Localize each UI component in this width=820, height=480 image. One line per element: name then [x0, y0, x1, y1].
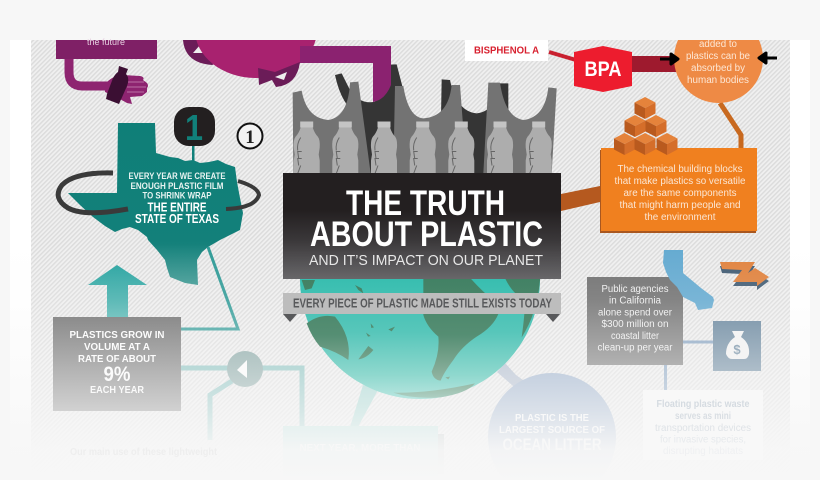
- orange chemical box: the environment: [644, 212, 716, 223]
- Texas text: [128, 171, 226, 226]
- bottles: [294, 122, 552, 180]
- California spend box: coastal litter: [611, 331, 660, 342]
- icon: hand with bottle: [105, 66, 148, 104]
- Texas text: TO SHRINK WRAP: [142, 190, 212, 200]
- orange chemical box: [600, 148, 757, 233]
- absorbed circle: added to: [699, 39, 737, 50]
- bisphenol label: BISPHENOL A: [474, 46, 539, 56]
- globe: [300, 279, 540, 399]
- floating plastic text: for invasive species,: [660, 434, 746, 446]
- growth box: 9%: [104, 363, 131, 386]
- purple text box and hand holding bottle: [56, 37, 157, 104]
- BPA connector: [549, 52, 678, 72]
- ocean litter circle: PLASTIC IS THE: [515, 412, 589, 424]
- absorbed circle: absorbed by: [691, 63, 745, 74]
- Texas text: STATE OF TEXAS: [135, 211, 219, 226]
- globe connector right: [497, 363, 530, 392]
- orange chemical box: The chemical building blocks: [618, 164, 742, 175]
- heading: THE TRUTH: [346, 184, 505, 223]
- floating plastic text: [643, 390, 763, 460]
- ocean litter circle: OCEAN LITTER: [502, 435, 602, 454]
- small numbered circle icon: [238, 124, 262, 148]
- orange connector: [720, 103, 741, 148]
- growth box: VOLUME AT A: [84, 342, 150, 353]
- title block: [283, 173, 561, 279]
- California spend box: Public agencies: [602, 284, 668, 295]
- Texas text: EVERY YEAR WE CREATE: [128, 171, 226, 181]
- absorbed circle: [674, 40, 763, 103]
- purple band over bags: [300, 46, 391, 102]
- rewind circle icon: [227, 351, 263, 387]
- growth box: RATE OF ABOUT: [78, 354, 156, 365]
- growth box: PLASTICS GROW IN: [70, 330, 164, 341]
- California spend box: alone spend over: [598, 308, 673, 318]
- icon: money bag: $: [733, 342, 741, 357]
- orange chemical box: that might harm people and: [620, 200, 740, 211]
- floating plastic text: serves as mini: [675, 411, 731, 422]
- next-year box: NEXT YEAR, MORE THAN: [300, 443, 420, 454]
- globe connector left: [350, 385, 378, 427]
- ocean litter circle: [488, 373, 616, 480]
- next-year box: [283, 426, 444, 476]
- ocean litter circle: LARGEST SOURCE OF: [499, 424, 606, 436]
- absorbed circle: plastics can be: [686, 51, 750, 62]
- title block: ABOUT PLASTIC: [310, 215, 543, 254]
- faint bottom-left caption: Our main use of these lightweight: [70, 447, 218, 458]
- bisphenol label: [465, 40, 548, 61]
- Texas text: ENOUGH PLASTIC FILM: [130, 181, 224, 191]
- arrow up: [88, 265, 147, 318]
- banner: [283, 293, 561, 322]
- BPA hexagon: [574, 46, 632, 92]
- shopping bags: [293, 64, 557, 173]
- Texas text: THE ENTIRE: [148, 200, 207, 214]
- number badge: [174, 107, 215, 163]
- arrow right-pointing: [660, 54, 678, 64]
- banner: EVERY PIECE OF PLASTIC MADE STILL EXISTS TODAY: [293, 296, 553, 310]
- arrow left-pointing: [759, 53, 777, 63]
- bottom fade: [0, 240, 820, 480]
- floating plastic text: transportation devices: [655, 423, 751, 434]
- purple text box and hand holding bottle: the future: [87, 37, 125, 47]
- title block: AND IT’S IMPACT ON OUR PLANET: [309, 253, 543, 269]
- growth box: [53, 317, 181, 411]
- growth box: EACH YEAR: [90, 385, 145, 396]
- icon: Texas: [58, 123, 259, 285]
- California spend box: [587, 277, 683, 365]
- absorbed circle: human bodies: [687, 75, 749, 86]
- California spend box: $300 million on: [602, 319, 668, 330]
- number badge: 1: [185, 107, 203, 148]
- icon: cube pyramid: [614, 97, 678, 155]
- connector lines: [181, 247, 302, 440]
- California spend box: clean-up per year: [598, 342, 673, 354]
- orange chemical box: that make plastics so versatile: [614, 176, 746, 187]
- floating plastic text: disrupting habitats: [663, 446, 743, 457]
- icon: zigzag arrow: [720, 262, 769, 290]
- floating plastic text: Floating plastic waste: [656, 399, 750, 410]
- orange chemical box: are the same components: [624, 188, 736, 199]
- icon: money bag: [713, 321, 761, 371]
- California spend box: in California: [609, 296, 661, 306]
- title-to-orange connector: [561, 186, 600, 211]
- small numbered circle icon: 1: [245, 127, 255, 148]
- icon: California: [663, 250, 714, 310]
- magenta swirl: [183, 40, 316, 87]
- BPA hexagon: BPA: [584, 58, 622, 81]
- blue connectors: [664, 340, 714, 393]
